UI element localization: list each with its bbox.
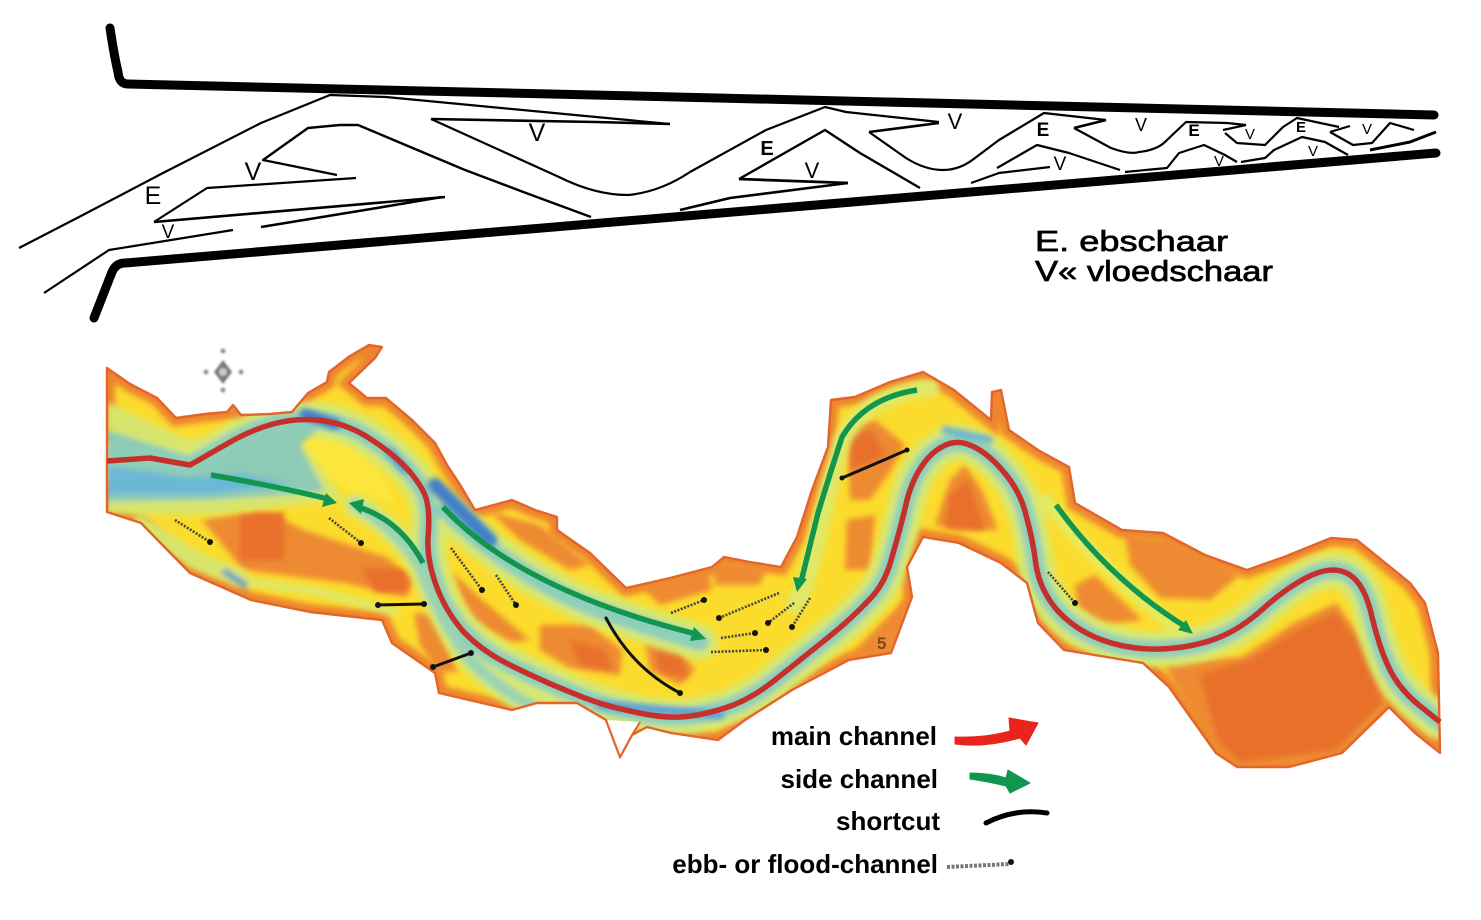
channel letters E and V: V bbox=[1135, 115, 1147, 135]
side channel green arrows bbox=[211, 390, 1193, 641]
legend labels bbox=[672, 721, 940, 879]
deep blue pockets bbox=[305, 414, 990, 715]
key: ebschaar and vloedschaar: E. ebschaar bbox=[1035, 226, 1228, 258]
channel letters E and V: V bbox=[948, 109, 963, 134]
orange sand bars bbox=[202, 420, 1389, 770]
channel letters E and V: E bbox=[1037, 120, 1049, 141]
channel letters E and V: E bbox=[1296, 119, 1306, 136]
channel letters E and V: E bbox=[1188, 121, 1200, 140]
channel letters E and V: V bbox=[1245, 126, 1255, 143]
key: ebschaar and vloedschaar bbox=[1035, 226, 1273, 288]
channel letters E and V: E bbox=[760, 138, 774, 160]
lower training wall bbox=[94, 153, 1436, 318]
orange shoreline fringe bbox=[107, 345, 1440, 767]
channel letters E and V: V bbox=[805, 158, 820, 183]
channel outlines bbox=[19, 95, 1436, 293]
shortcut black arrows bbox=[375, 448, 910, 696]
channel letters E and V: V bbox=[1362, 121, 1372, 138]
channel letters E and V: V bbox=[529, 119, 546, 147]
legend: side channel arrow bbox=[970, 770, 1030, 793]
channel letters E and V: V bbox=[245, 158, 262, 186]
legend labels: ebb- or flood-channel bbox=[672, 849, 938, 879]
channel letters E and V bbox=[145, 109, 1372, 243]
harbour inlet outline bbox=[606, 720, 640, 757]
depot label: 5 bbox=[877, 634, 886, 653]
panel: estuary depth map bbox=[100, 340, 1445, 780]
estuary outline bbox=[107, 345, 1440, 767]
ebb or flood channel dotted arrows bbox=[175, 518, 1078, 653]
legend bbox=[672, 718, 1047, 879]
legend labels: shortcut bbox=[836, 806, 940, 836]
panel: schematic channel diagram bbox=[19, 28, 1436, 318]
channel letters E and V: E bbox=[145, 182, 161, 210]
key: ebschaar and vloedschaar: V« vloedschaar bbox=[1035, 256, 1273, 288]
icon: compass rose bbox=[204, 349, 243, 392]
legend: main channel arrow bbox=[955, 718, 1038, 745]
river bed colour bands bbox=[100, 340, 1445, 780]
channel letters E and V: V bbox=[1308, 143, 1318, 160]
channel letters E and V: V bbox=[1054, 154, 1067, 175]
upper training wall bbox=[110, 28, 1434, 115]
channel letters E and V: V bbox=[1214, 153, 1224, 170]
pale green and teal channel bands bbox=[107, 388, 1440, 722]
legend labels: side channel bbox=[780, 764, 938, 794]
legend: ebb or flood channel arrow bbox=[947, 859, 1014, 867]
main channel red line bbox=[107, 419, 1440, 722]
legend labels: main channel bbox=[771, 721, 937, 751]
pale yellow shoal bbox=[306, 438, 394, 503]
channel letters E and V: V bbox=[162, 222, 175, 243]
darker orange shoals bbox=[240, 430, 1382, 762]
legend: shortcut arrow bbox=[986, 812, 1047, 823]
